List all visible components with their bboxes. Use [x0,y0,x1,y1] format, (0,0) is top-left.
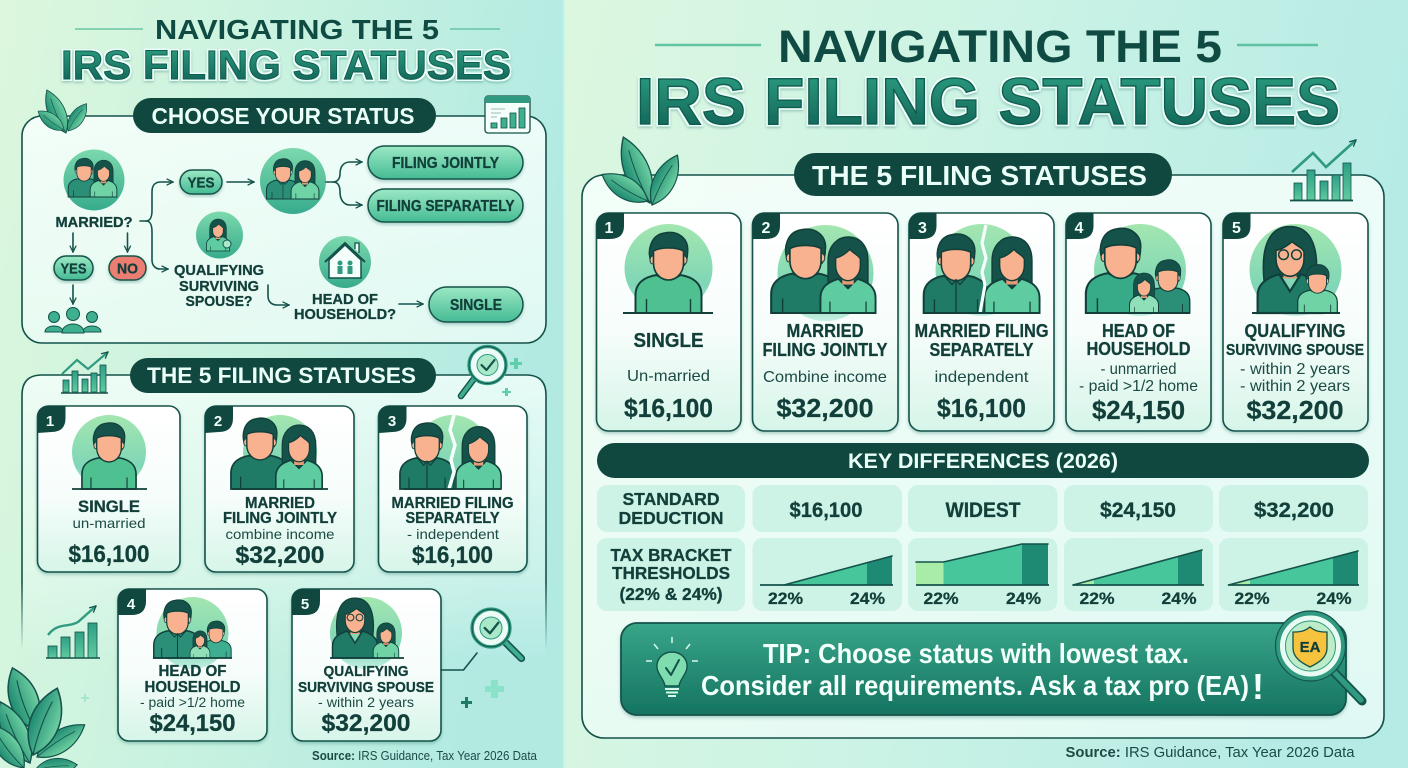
right title [636,21,1340,138]
text: single: Un-married [627,368,710,385]
chart: bracket spouse: 22% [1234,589,1270,608]
heading: the 5 filing statuses [130,358,436,393]
icon: married couple [64,150,124,210]
heading: key differences [597,443,1369,478]
left title: IRS FILING STATUSES [61,42,511,88]
icon: couple [231,415,328,489]
icon: parent with kids [153,597,232,669]
badge 1: 1 [46,413,54,430]
text: married filing jointly: $32,200 [776,393,874,423]
source right: Source: IRS Guidance, Tax Year 2026 Data [1066,744,1355,761]
text: qualifying surviving spouse: - within 2 years [1240,378,1350,395]
pill: yes branch [180,170,222,194]
chart: bracket jointly: 24% [1006,589,1041,608]
arrows: couple branch [326,162,362,205]
label: married?: MARRIED? [56,215,133,231]
table: standard deduction row: $24,150 [1100,499,1176,522]
text: married filing jointly: MARRIED [245,495,315,512]
badge 5: 5 [301,596,309,613]
icon: leaves [597,133,687,210]
background: right poster [565,0,1408,768]
badge 5 [1223,213,1250,240]
text: qualifying surviving spouse: $32,200 [1246,395,1344,425]
pill: filing jointly: FILING JOINTLY [392,155,500,172]
pill: filing separately [368,189,523,222]
text: single: SINGLE [78,498,140,516]
icon: parent and child [330,597,404,669]
right poster [582,21,1384,761]
chart: bracket single: 22% [768,589,803,608]
text: single: un-married [72,515,146,531]
label: qualifying surviving spouse: QUALIFYING [174,262,264,279]
text: married filing separately: independent [934,369,1029,386]
badge 4 [118,589,146,616]
icon: house [319,236,371,288]
heading: the 5 filing statuses: THE 5 FILING STATUSES [812,160,1147,191]
icon: EA magnifier [1276,611,1362,701]
icon: plus sparkles [81,680,504,708]
badge 3: 3 [388,413,396,430]
icon: leaves [34,87,92,136]
text: married filing separately: MARRIED FILING [914,321,1048,341]
table: standard deduction row: WIDEST [946,499,1021,522]
text: head of household [140,663,245,737]
text: married filing separately: SEPARATELY [930,340,1034,360]
text: qualifying surviving spouse: SURVIVING SPOUSE [1226,342,1364,359]
tip text: Consider all requirements. Ask a tax pro (EA) [701,670,1249,701]
label: qualifying surviving spouse [174,262,264,310]
card 5: qualifying surviving spouse [292,589,441,741]
badge 1 [596,213,624,240]
chart: bracket jointly: 22% [924,589,958,608]
icon: single person [72,415,147,489]
card 4: head of household [1066,213,1211,431]
card 3: married filing separately [909,213,1054,431]
right title: NAVIGATING THE 5 [778,21,1222,72]
icon: magnifier lower [472,609,521,658]
table: tax bracket thresholds row: (22% & 24%) [620,584,722,604]
text: head of household: $24,150 [1092,395,1185,425]
card 2: married filing jointly [205,406,354,572]
icon: parent and child [1250,224,1342,316]
left poster [0,14,546,768]
icon: growth chart [61,352,108,393]
table: tax bracket thresholds row: TAX BRACKET [610,545,732,565]
text: married filing jointly [762,321,888,423]
badge 1: 1 [605,220,614,237]
text: head of household: HOUSEHOLD [144,679,240,696]
table: standard deduction row: $32,200 [1254,499,1334,522]
icon: sparkles [502,358,522,396]
panel: the 5 filing statuses (left) [22,346,546,741]
text: married filing jointly: MARRIED [786,321,864,341]
tip text [701,638,1264,707]
badge 3: 3 [918,220,927,237]
badge 4: 4 [1075,220,1084,237]
card 4: head of household [118,589,267,741]
tip text: ! [1252,666,1264,707]
pill: filing separately: FILING SEPARATELY [376,198,515,215]
badge 5 [292,589,320,616]
text: single: $16,100 [624,393,713,423]
text: married filing jointly: combine income [226,526,335,542]
text: head of household: HEAD OF [158,663,226,680]
label: qualifying surviving spouse: SURVIVING [179,278,259,295]
text: qualifying surviving spouse: - within 2 years [1240,361,1350,378]
heading: choose your status [133,98,436,133]
callout: tip [621,611,1362,715]
icon: growth chart lower [46,606,100,658]
text: qualifying surviving spouse: $32,200 [322,710,410,737]
arrows: married branch [140,182,173,269]
text: head of household: HOUSEHOLD [1086,339,1190,359]
text: married filing separately: MARRIED FILING [392,495,514,512]
panel: the 5 filing statuses (right) [582,133,1384,738]
icon: separated couple [924,224,1040,316]
text: head of household: - paid >1/2 home [140,694,245,710]
label: head of household [294,291,396,323]
text: single [68,498,150,568]
pill: yes [54,256,93,280]
pill: no [109,256,146,280]
text: single: SINGLE [634,330,704,352]
icon: couple [260,148,326,214]
table: standard deduction row: DEDUCTION [618,508,724,528]
heading: the 5 filing statuses: THE 5 FILING STATUSES [147,363,416,388]
arrows: married down [73,233,128,304]
pill: yes branch: YES [188,174,214,192]
source left: Source: IRS Guidance, Tax Year 2026 Data [312,749,537,763]
icon: people group [45,308,101,333]
icon: separated couple [400,415,501,489]
badge 2 [752,213,780,240]
background: left poster [0,0,563,768]
left title [61,14,511,88]
icon: plant [0,663,91,768]
chart: bracket jointly [916,544,1049,608]
card 1: single [596,213,741,431]
badge 2: 2 [214,413,222,430]
text: single [624,330,713,423]
card 2: married filing jointly [752,213,898,431]
card 1: single [38,406,180,572]
heading: the 5 filing statuses [794,153,1172,196]
heading: key differences: KEY DIFFERENCES (2026) [848,450,1118,473]
pill: yes: YES [60,260,86,278]
text: married filing jointly: FILING JOINTLY [223,510,338,527]
pill: filing jointly [368,146,523,179]
tip text: TIP: Choose status with lowest tax. [763,638,1189,669]
table: standard deduction row: $16,100 [790,499,862,522]
pill: single: SINGLE [450,297,502,314]
text: qualifying surviving spouse [298,663,434,737]
icon: light bulb [646,637,698,696]
text: married filing jointly: FILING JOINTLY [762,340,888,360]
card 3: married filing separately [378,406,527,572]
pill: no: NO [117,260,138,278]
connector line [441,653,477,670]
icon: single person [623,224,713,313]
icon: parent with kids [1086,224,1190,316]
text: married filing jointly: Combine income [763,369,887,386]
heading: choose your status: CHOOSE YOUR STATUS [152,103,414,129]
text: qualifying surviving spouse: QUALIFYING [324,663,408,680]
text: head of household [1079,321,1198,425]
icon: couple [771,225,876,321]
text: married filing jointly [223,495,338,569]
text: married filing separately: $16,100 [937,393,1026,423]
badge 4: 4 [127,596,136,613]
icon: growth chart [1290,140,1356,200]
text: single: $16,100 [68,541,150,568]
text: qualifying surviving spouse: QUALIFYING [1244,321,1346,341]
label: qualifying surviving spouse: SPOUSE? [186,293,252,310]
chart: bracket spouse: 24% [1316,589,1352,608]
left title: NAVIGATING THE 5 [155,14,439,45]
text: married filing separately [914,321,1048,423]
label: head of household: HEAD OF [312,291,378,308]
chart: bracket single: 24% [850,589,885,608]
icon: browser chart [485,96,530,133]
arrow: household to single [399,303,423,305]
badge 3 [378,406,406,433]
badge 2: 2 [762,220,771,237]
chart: bracket household [1073,550,1204,608]
chart: bracket household: 24% [1162,589,1196,608]
text: qualifying surviving spouse: SURVIVING SPOUSE [298,679,434,696]
badge 3 [909,213,936,240]
icon: magnifier check [461,346,506,396]
text: married filing separately: - independent [407,526,499,542]
text: qualifying surviving spouse: - within 2 years [318,694,414,710]
text: married filing separately [392,495,514,569]
text: head of household: - paid >1/2 home [1079,378,1198,395]
badge 4 [1066,213,1094,240]
text: married filing jointly: $32,200 [236,542,324,569]
text: qualifying surviving spouse [1226,321,1364,425]
chart: bracket single [760,556,893,608]
badge 1 [38,406,66,433]
arrow: yes to couple [227,181,254,183]
chart: bracket household: 22% [1080,589,1114,608]
arrow: spouse to household [268,285,289,305]
table: tax bracket thresholds row [597,538,1368,611]
table: standard deduction row [597,485,1368,532]
text: married filing separately: SEPARATELY [406,510,500,527]
text: head of household: - unmarried [1100,361,1176,378]
text: married filing separately: $16,100 [412,542,493,569]
pill: single [429,287,523,322]
table: tax bracket thresholds row: THRESHOLDS [612,563,730,583]
panel: choose your status [22,87,546,343]
right title: IRS FILING STATUSES [636,64,1340,138]
text: head of household: $24,150 [150,710,236,737]
card 5: qualifying surviving spouse [1223,213,1368,431]
label: head of household: HOUSEHOLD? [294,306,396,323]
text: head of household: HEAD OF [1102,321,1175,341]
icon: EA magnifier: EA [1300,639,1321,656]
icon: surviving spouse [196,212,243,258]
badge 5: 5 [1232,220,1241,237]
chart: bracket spouse [1228,551,1359,608]
table: standard deduction row: STANDARD [622,489,720,509]
badge 2 [205,406,233,433]
